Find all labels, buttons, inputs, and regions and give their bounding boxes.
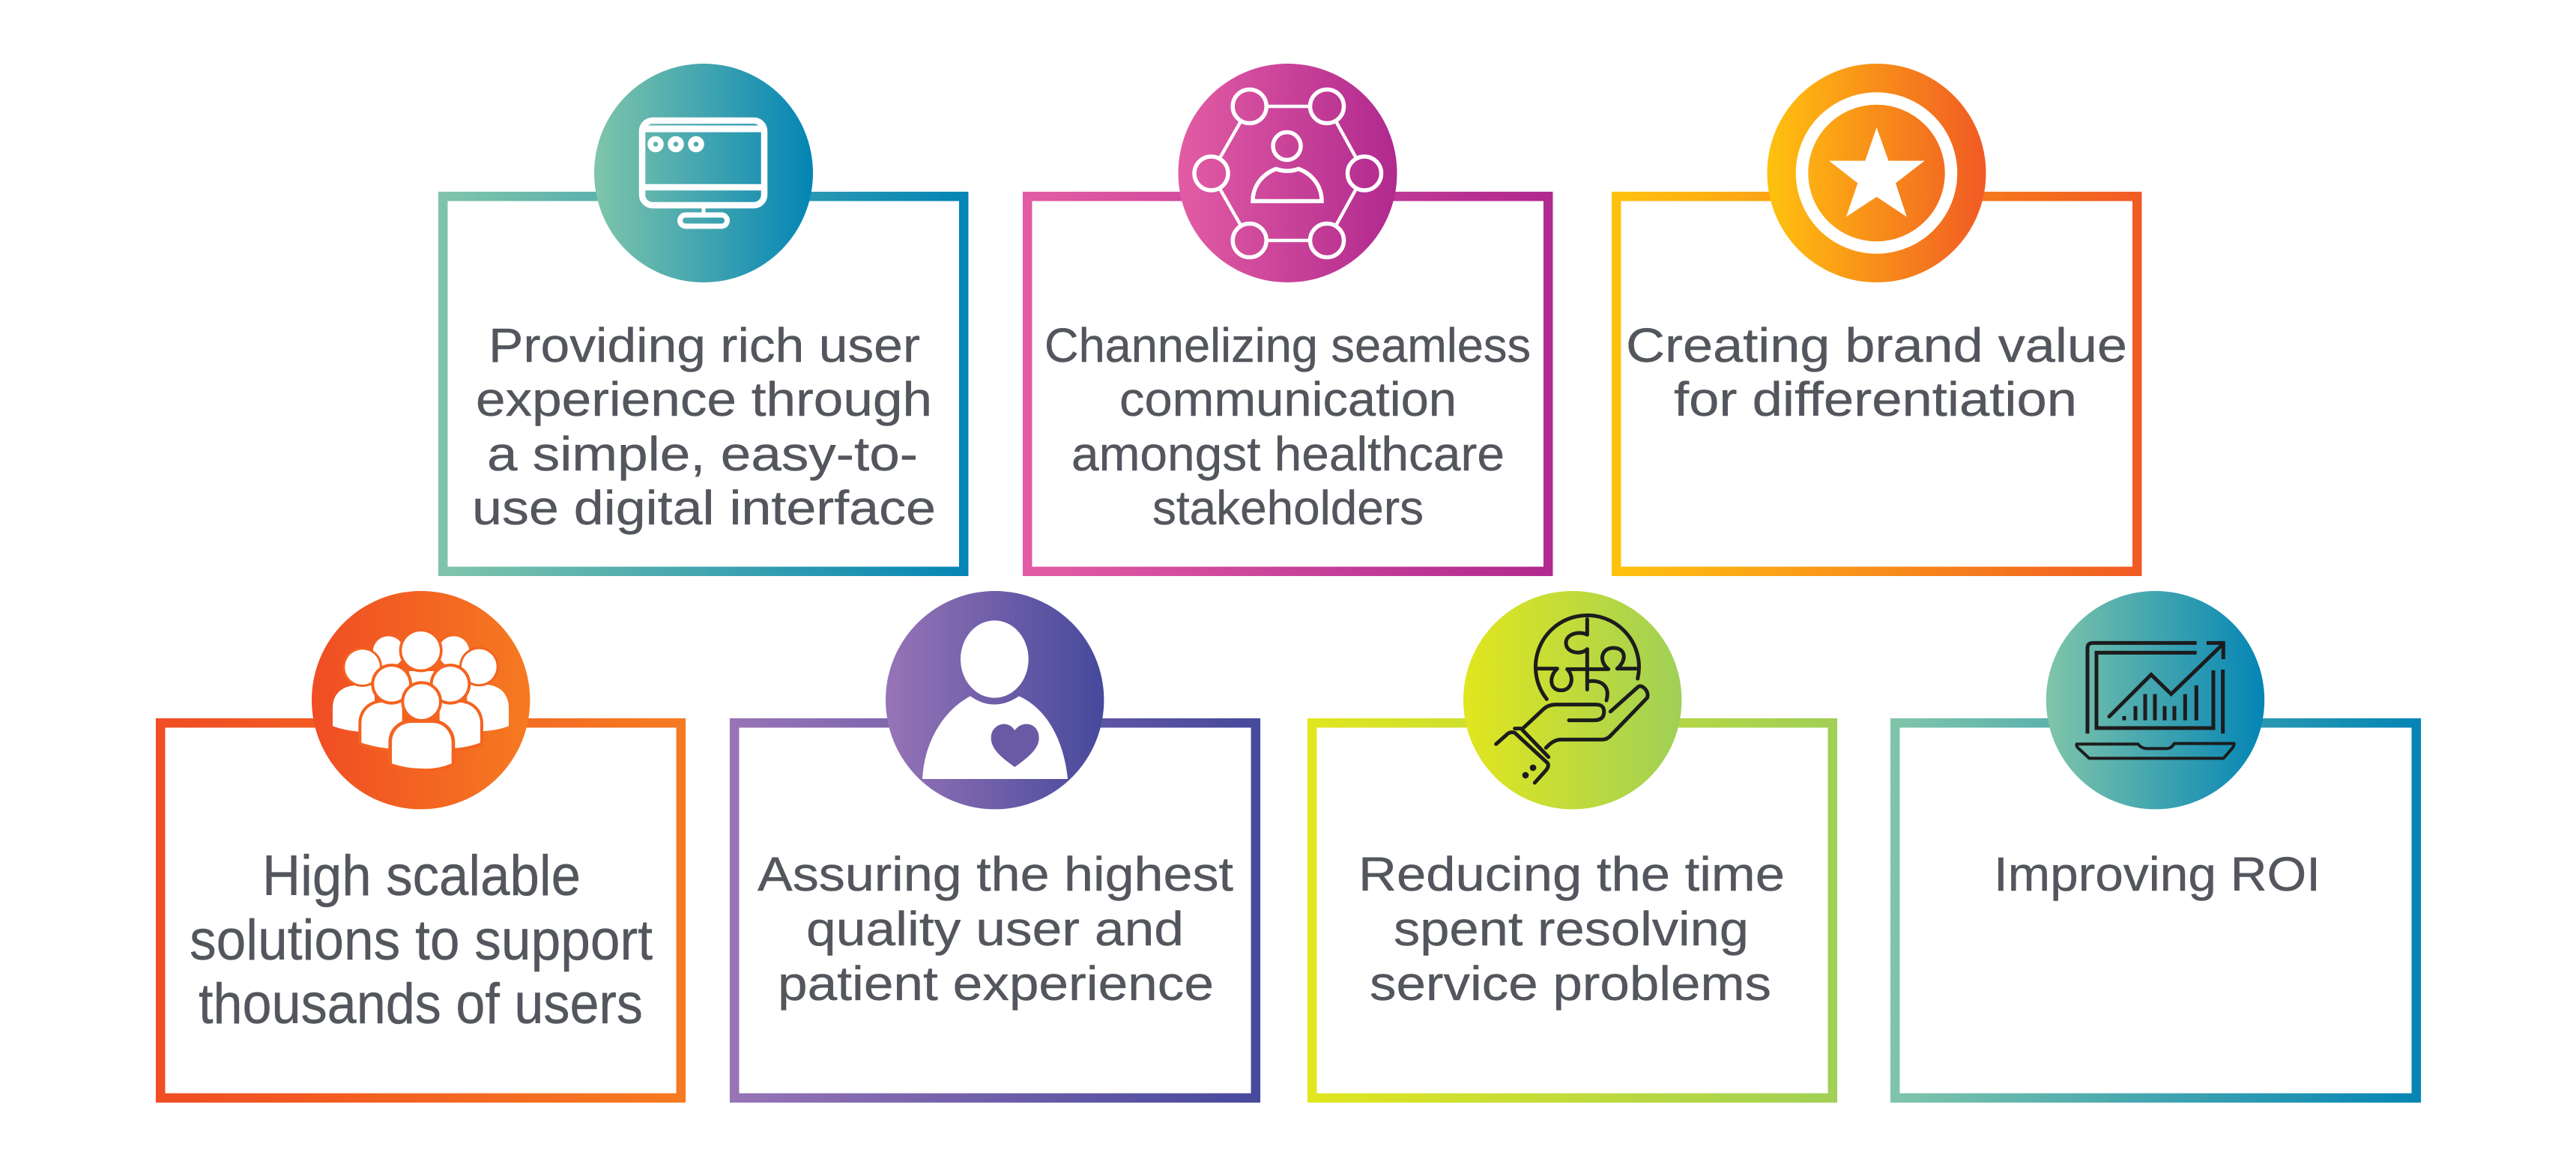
text: patient experience: patient experience — [778, 957, 1214, 1010]
text: seamless communication — [1044, 318, 1531, 535]
text: brand value: for differentiation — [1674, 372, 2077, 426]
icon: stakeholder network — [1194, 90, 1382, 258]
panel border — [1027, 196, 1548, 572]
panel border — [1895, 723, 2416, 1098]
text: patient experience — [758, 847, 1233, 1010]
text: scalable solutions — [190, 844, 653, 1036]
text: seamless communication: stakeholders — [1152, 481, 1424, 535]
icon badge circle — [886, 591, 1104, 809]
icon badge circle — [594, 64, 813, 282]
icon badge circle — [1463, 591, 1681, 809]
panel border — [1312, 723, 1833, 1098]
icon: laptop with growth chart — [2076, 643, 2234, 758]
text: scalable solutions: thousands of users — [199, 972, 643, 1036]
text: rich user experience: use digital interface — [472, 481, 936, 535]
icon badge circle — [1767, 64, 1986, 282]
text: rich user experience: a simple, easy-to- — [487, 427, 918, 481]
text: patient experience: Assuring the highest — [758, 847, 1233, 901]
icon: desktop monitor — [642, 121, 764, 226]
icon: star in ring — [1802, 99, 1951, 247]
panel: resolving service problems — [1312, 591, 1833, 1098]
icon: hand holding puzzle — [1496, 616, 1648, 783]
text: resolving service problems: Reducing the time — [1358, 847, 1785, 901]
icon badge circle — [1178, 64, 1397, 282]
panel: rich user experience — [443, 64, 964, 572]
text: rich user experience — [472, 318, 936, 535]
text: brand value — [1626, 318, 2127, 426]
panel: brand value — [1616, 64, 2137, 572]
text: seamless communication: Channelizing seamless — [1044, 318, 1531, 372]
icon: patient with heart — [922, 620, 1068, 779]
text: resolving service problems: spent resolving — [1394, 902, 1749, 956]
text: improving ROI: Improving ROI — [1994, 847, 2320, 901]
text: rich user experience: Providing rich user — [489, 318, 920, 372]
panel: scalable solutions — [160, 591, 681, 1098]
text: scalable solutions: solutions to support — [190, 909, 653, 972]
icon badge circle — [312, 591, 530, 809]
panel border — [160, 723, 681, 1098]
text: rich user experience: experience through — [476, 372, 932, 426]
text: resolving service problems — [1358, 847, 1785, 1010]
text: resolving service problems: service problems — [1370, 957, 1771, 1010]
panel border — [443, 196, 964, 572]
icon: crowd of users — [333, 631, 509, 769]
panel border — [1616, 196, 2137, 572]
panel: seamless communication — [1027, 64, 1548, 572]
text: brand value: Creating brand value — [1626, 318, 2127, 372]
panel border — [734, 723, 1256, 1098]
panel: patient experience — [734, 591, 1256, 1098]
text: seamless communication: communication — [1119, 372, 1457, 426]
text: patient experience: quality user and — [806, 902, 1184, 956]
text: seamless communication: amongst healthcare — [1071, 427, 1505, 481]
text: scalable solutions: High scalable — [262, 844, 581, 908]
icon badge circle — [2046, 591, 2264, 809]
panel: improving ROI — [1895, 591, 2416, 1098]
